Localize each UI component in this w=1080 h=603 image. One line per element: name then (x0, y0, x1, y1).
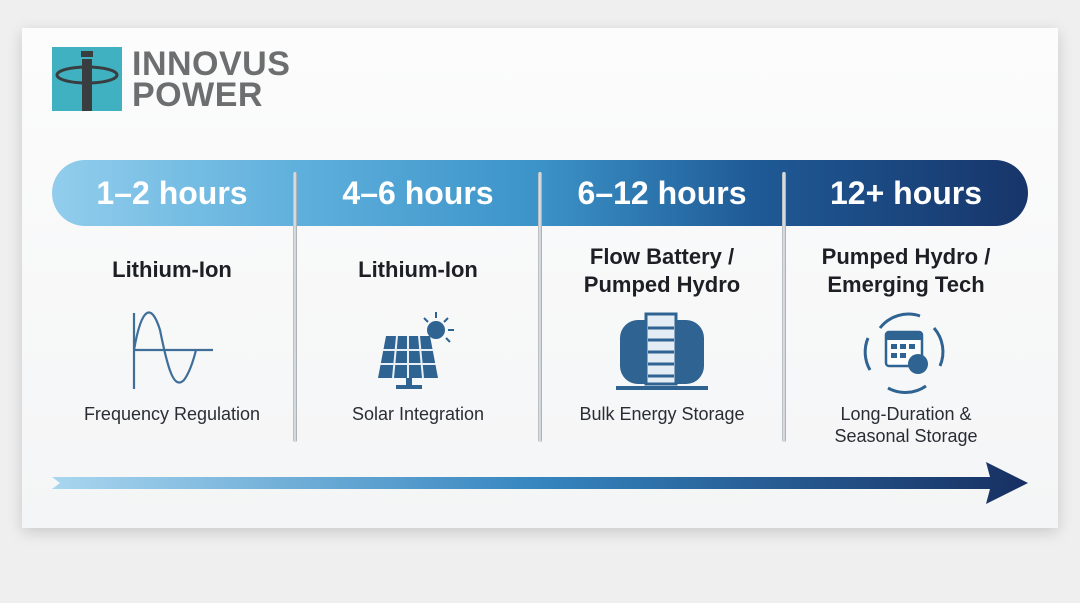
logo text: POWER (132, 76, 263, 114)
panel: card (22, 28, 1058, 528)
caption: col3: Bulk Energy Storage (579, 404, 745, 424)
icon: seasonal cycle (864, 312, 944, 394)
heading: 6-12 hours: 6–12 hours (578, 175, 746, 211)
title: col4 (822, 244, 990, 297)
title: col1: Lithium-Ion (112, 257, 232, 282)
title: col3 (584, 244, 740, 297)
heading: 12+ hours: 12+ hours (830, 175, 982, 211)
caption: col2: Solar Integration (352, 404, 484, 424)
icon: solar panel (378, 312, 454, 389)
icon: tank (616, 312, 708, 390)
heading: 1-2 hours: 1–2 hours (96, 175, 248, 211)
title: col2: Lithium-Ion (358, 257, 478, 282)
title: col3: Pumped Hydro (584, 272, 740, 297)
logo text (132, 45, 290, 114)
arrow: timeline (52, 462, 1028, 504)
header bar: durations (52, 160, 1028, 226)
icon: logo mark (52, 47, 122, 111)
logo (52, 45, 290, 114)
caption: col4 (834, 404, 978, 446)
caption: col4: Long-Duration & (840, 404, 972, 424)
icon: sine wave (132, 311, 213, 389)
logo text: INNOVUS (132, 45, 290, 83)
heading: 4-6 hours: 4–6 hours (342, 175, 494, 211)
title: col4: Emerging Tech (827, 272, 985, 297)
caption: col4: Seasonal Storage (834, 426, 978, 446)
title: col3: Flow Battery / (590, 244, 734, 269)
title: col4: Pumped Hydro / (822, 244, 990, 269)
caption: col1: Frequency Regulation (84, 404, 260, 424)
